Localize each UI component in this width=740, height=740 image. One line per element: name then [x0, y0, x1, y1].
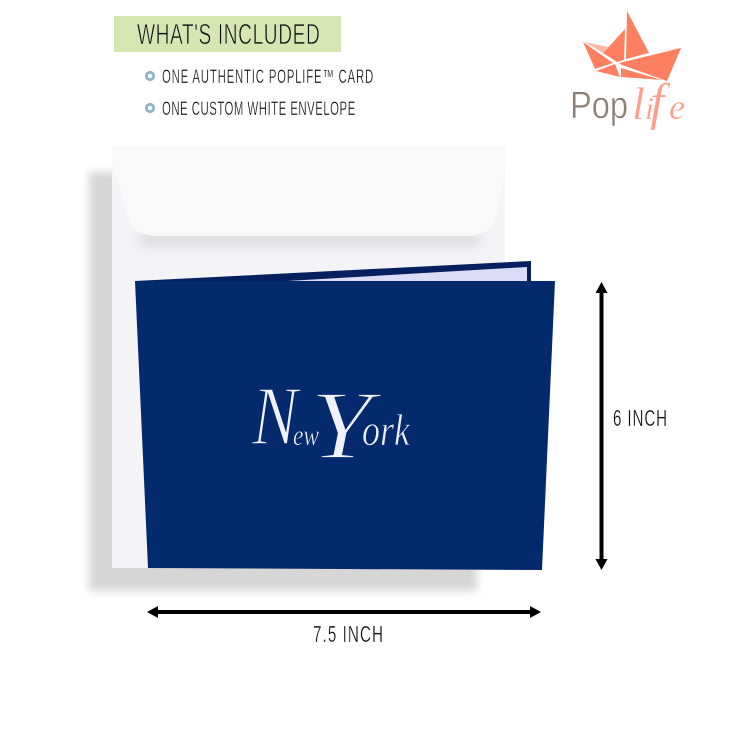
item: envelope: ONE CUSTOM WHITE ENVELOPE — [162, 99, 355, 120]
logo: poplife — [570, 11, 685, 131]
wordmark: l — [632, 78, 645, 129]
wordmark: f — [650, 74, 671, 131]
flap shadow — [140, 234, 480, 246]
card lettering: new york: ew — [293, 419, 319, 452]
heading: what's included: WHAT'S INCLUDED — [137, 19, 320, 51]
envelope flap — [112, 146, 505, 236]
label: height: 6 INCH — [613, 406, 667, 432]
card — [135, 261, 555, 570]
product: envelope and card — [89, 146, 555, 591]
card lettering: new york: N — [251, 370, 301, 463]
label: width: 7.5 INCH — [313, 622, 383, 648]
arrow: width dimension — [147, 606, 541, 618]
wordmark: i — [645, 90, 654, 126]
item: card: ONE AUTHENTIC POPLIFE™ CARD — [162, 67, 373, 88]
wordmark — [570, 74, 685, 131]
wordmark: Pop — [570, 85, 628, 127]
card lettering: new york — [251, 370, 411, 480]
envelope — [112, 146, 505, 568]
card inside — [287, 267, 527, 282]
card front — [135, 281, 555, 570]
icon: origami boat — [583, 11, 683, 81]
envelope shadow — [89, 172, 477, 591]
arrow: height dimension — [596, 282, 608, 570]
card lettering: new york: Y — [310, 372, 383, 480]
list of included items — [146, 67, 373, 120]
card back panel — [135, 261, 531, 282]
card lettering: new york: ork — [362, 406, 411, 455]
wordmark: e — [669, 87, 685, 127]
